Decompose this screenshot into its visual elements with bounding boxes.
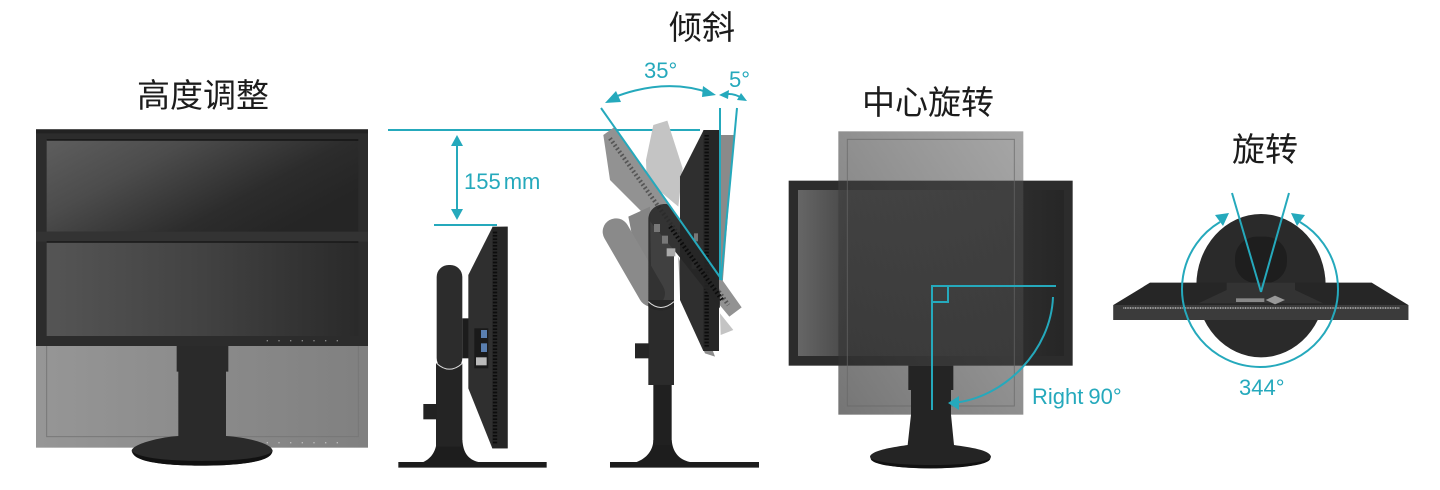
tilt monitor: [603, 121, 759, 468]
heading: pivot: 中心旋转: [862, 84, 994, 121]
ghost: 35 degree tilt body: [603, 127, 742, 317]
tilted arm and ports: [648, 204, 723, 310]
heading: swivel: 旋转: [1232, 131, 1298, 168]
stand: [870, 366, 991, 468]
logo: [1236, 296, 1285, 304]
tilt guide lines: [601, 108, 737, 280]
portrait ghost monitor: [838, 131, 1023, 415]
USB ports: [474, 328, 488, 368]
stand post: [423, 265, 462, 447]
ghost: 35 degree panel vents: [610, 138, 728, 305]
arrow: swivel arc: [1182, 213, 1338, 367]
height measurement line top: [388, 129, 700, 131]
swivel guide lines: [1232, 193, 1289, 292]
arrow: 155 mm: [451, 135, 463, 220]
front monitor: height adjustment: [36, 129, 368, 466]
ghost: lower panel: [678, 257, 715, 357]
arrow: 35 degree arc: [605, 86, 716, 103]
label: Right 90 degrees: Right90°: [1032, 384, 1122, 409]
side monitor: [398, 227, 547, 468]
round base: [1196, 214, 1326, 357]
side panel body: [468, 227, 508, 448]
height measurement line bottom: [434, 224, 497, 226]
pivot monitor: [789, 131, 1073, 468]
arrow: 5 degree arc: [719, 90, 747, 101]
ghost: light intermediate tilt: [646, 121, 733, 335]
label: 344 degrees: 344°: [1239, 375, 1285, 400]
heading: height adjustment: 高度调整: [137, 77, 269, 114]
label: 5 degrees: 5°: [729, 67, 750, 92]
ghost: 5 degree tilt: [719, 135, 734, 283]
hinge: [462, 318, 470, 358]
raised monitor: [36, 129, 368, 346]
swivel monitor top view: [1113, 214, 1408, 357]
panel body: [1113, 283, 1408, 320]
lowered ghost monitor: [36, 343, 368, 448]
label: 155 mm: 155mm: [464, 169, 540, 194]
heading: tilt: 倾斜: [669, 9, 735, 46]
stand base: [610, 440, 759, 468]
ghost: tilted arm: [616, 207, 652, 300]
arrow: right 90 degrees: [948, 297, 1053, 410]
stand post: [635, 300, 674, 445]
landscape monitor: [789, 181, 1073, 366]
pivot right-angle guides: [932, 286, 1056, 410]
upright panel: [680, 130, 719, 351]
stand: [132, 346, 273, 466]
label: 35 degrees: 35°: [644, 58, 677, 83]
neck: [1235, 237, 1287, 283]
stand base: [398, 440, 547, 468]
